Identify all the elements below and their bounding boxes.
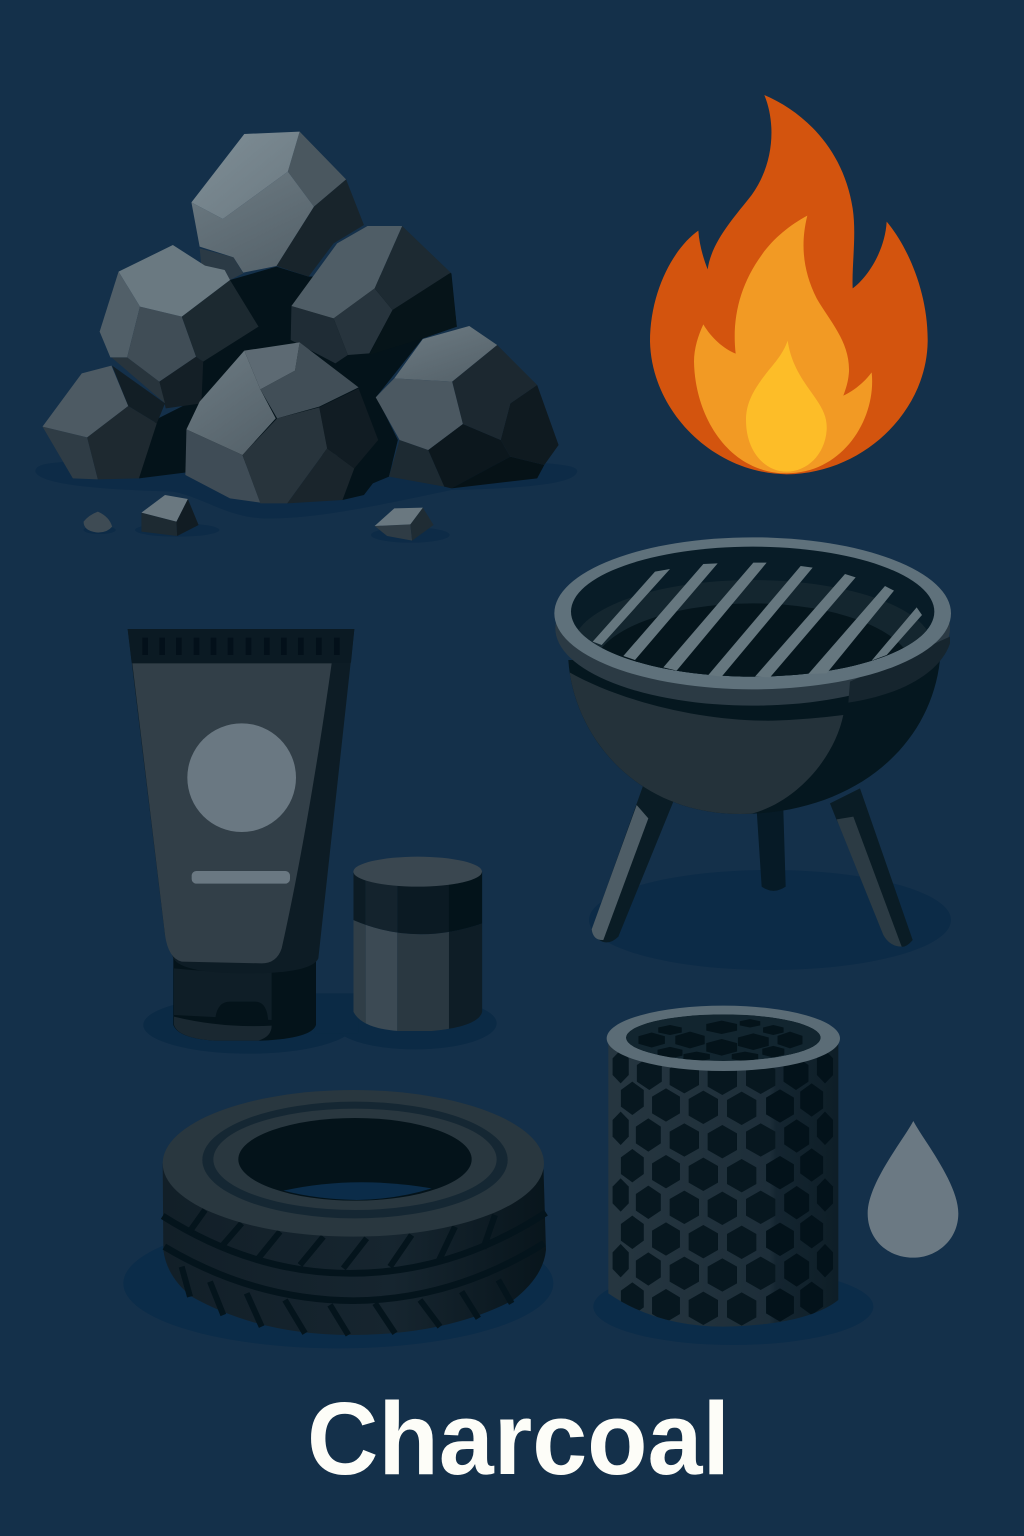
coal rock: top xyxy=(191,132,364,280)
tyre grooves and treads xyxy=(163,1210,546,1335)
tube body xyxy=(128,629,354,973)
icon: flame xyxy=(650,95,928,474)
tube crimp xyxy=(128,629,354,663)
filter shadow xyxy=(593,1268,873,1345)
grill rim xyxy=(554,537,951,689)
tube label circle xyxy=(187,723,296,832)
grill left leg xyxy=(592,785,673,942)
tyre inner ring xyxy=(213,1109,497,1210)
grill bowl xyxy=(560,660,940,817)
tyre sidewall xyxy=(163,1163,546,1335)
icon: kettle grill xyxy=(554,537,951,970)
tube label bar xyxy=(192,871,290,884)
coal rock: far left xyxy=(42,366,165,479)
icon: coal pile xyxy=(35,132,577,543)
ground shadow under coal xyxy=(35,462,577,518)
flame core xyxy=(746,341,827,472)
coal rock: front centre xyxy=(185,342,378,503)
icon: water drop xyxy=(868,1121,958,1258)
grill right leg xyxy=(830,788,913,947)
coal fragments xyxy=(84,495,450,543)
icon: honeycomb filter xyxy=(593,1006,873,1345)
flame outer xyxy=(650,95,928,474)
tyre shadow xyxy=(123,1218,553,1348)
filter opening xyxy=(626,1014,821,1062)
icon: car tyre xyxy=(123,1090,553,1348)
filter honeycomb cells xyxy=(613,1050,833,1326)
jar body xyxy=(353,915,482,1035)
dark gaps between rocks xyxy=(139,267,457,500)
grill grate bars xyxy=(593,563,922,677)
product shadows xyxy=(143,993,497,1054)
flame middle xyxy=(694,216,872,473)
tube front face xyxy=(132,663,332,963)
jar lid xyxy=(353,856,482,934)
icon: cosmetic tube and jar xyxy=(128,629,497,1054)
tyre hole floor xyxy=(283,1182,432,1200)
coal rock: left middle xyxy=(100,245,259,408)
grill rim lip xyxy=(555,551,950,706)
filter rim xyxy=(607,1006,840,1071)
title: Charcoal xyxy=(307,1381,730,1496)
tyre ring groove xyxy=(202,1102,508,1218)
coal rock: right xyxy=(376,326,559,488)
tyre hole xyxy=(238,1118,472,1201)
grill centre leg xyxy=(757,810,786,891)
tube cap xyxy=(173,955,316,1041)
filter body xyxy=(608,1040,838,1327)
grill shadow xyxy=(589,870,951,970)
grill interior xyxy=(571,546,934,677)
tyre top face xyxy=(163,1090,544,1237)
coal rock: right middle xyxy=(291,226,457,363)
